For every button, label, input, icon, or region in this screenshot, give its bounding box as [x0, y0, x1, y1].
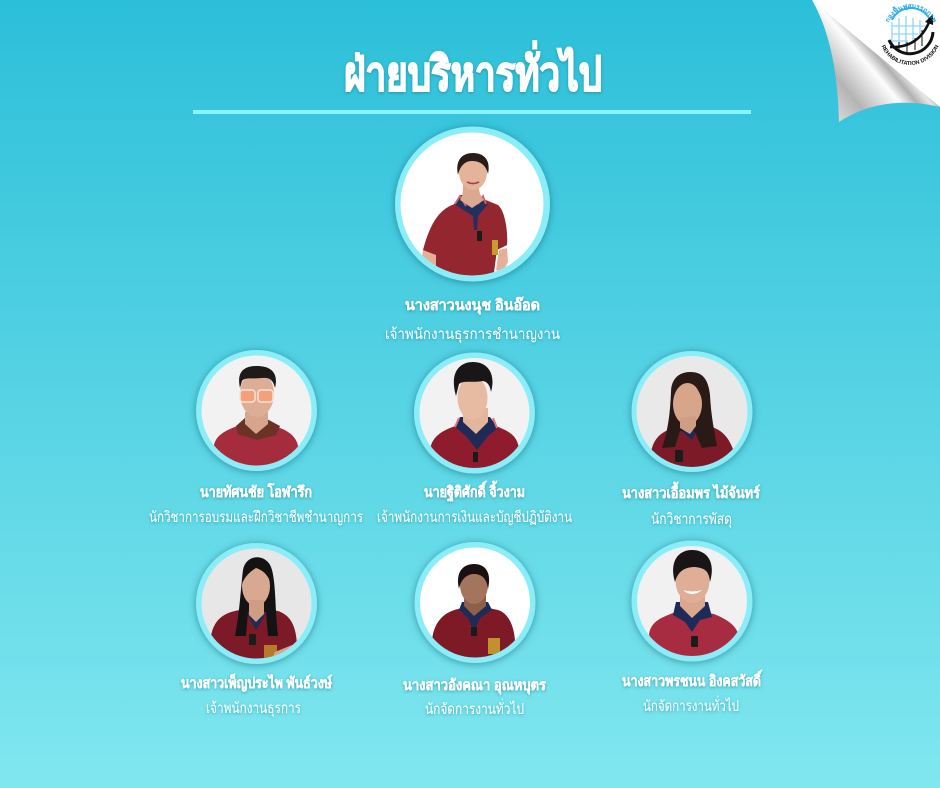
name: นางสาวเอื้อมพร ไม้จันทร์ — [622, 481, 761, 502]
role: นักวิชาการอบรมและฝึกวิชาชีพชำนาญการ — [149, 509, 363, 526]
name: นางสาวพรชนน อิงคสวัสดิ์ — [622, 669, 763, 690]
logo: กองฟื้นฟูสมรรถภาพ — [886, 4, 936, 23]
role: เจ้าพนักงานธุรการ — [206, 700, 301, 718]
name: นางสาวเพ็ญประไพ พันธ์วงษ์ — [181, 673, 332, 692]
portrait — [632, 351, 752, 472]
page curl corner with logo — [812, 0, 940, 122]
name: นางสาวอังคณา อุณหบุตร — [403, 677, 547, 695]
person 1: lead — [385, 126, 560, 344]
portrait — [632, 540, 752, 662]
person 2 — [149, 350, 363, 526]
role: เจ้าพนักงานการเงินและบัญชีปฏิบัติงาน — [377, 509, 572, 526]
portrait — [414, 352, 535, 474]
person 7 — [622, 540, 763, 715]
role: นักวิชาการพัสดุ — [651, 511, 732, 529]
person 5 — [181, 543, 332, 718]
person 4 — [622, 351, 761, 529]
name: นางสาวนงนุช อินอ๊อด — [405, 296, 540, 315]
role: เจ้าพนักงานธุรการชำนาญงาน — [385, 326, 560, 344]
role: นักจัดการงานทั่วไป — [425, 698, 524, 718]
name: นายทัศนชัย โอฬารึก — [200, 482, 312, 501]
portrait — [196, 543, 317, 664]
name: นายฐิติศักดิ์ จิ้วงาม — [424, 480, 525, 502]
portrait — [414, 542, 536, 663]
person 3 — [377, 352, 572, 526]
logo — [882, 4, 938, 65]
portrait — [395, 126, 550, 282]
title underline — [193, 110, 751, 114]
title: ฝ่ายบริหารทั่วไป — [344, 40, 602, 100]
role: นักจัดการงานทั่วไป — [643, 695, 739, 715]
logo: REHABILITATION DIVISION — [882, 44, 938, 65]
person 6 — [403, 542, 547, 718]
portrait — [196, 350, 317, 471]
